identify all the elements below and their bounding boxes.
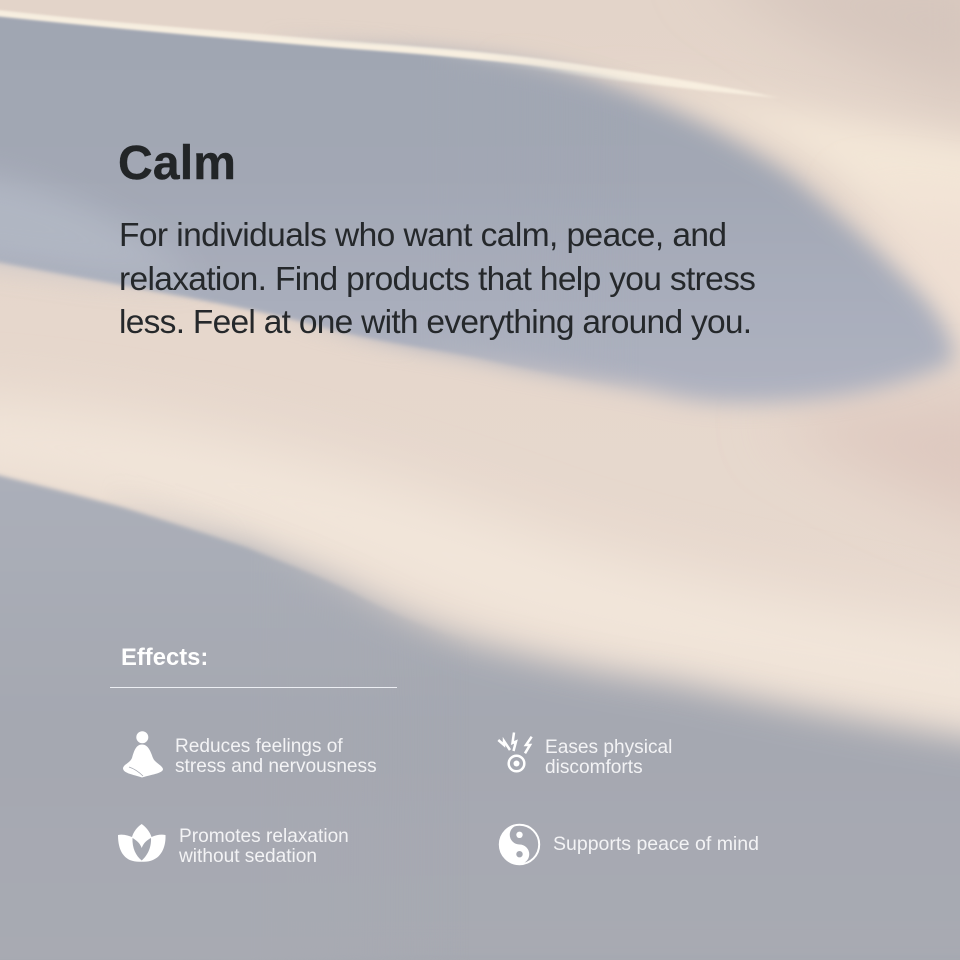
icon: lotus <box>118 824 166 862</box>
text: eases discomfort: discomforts <box>545 757 643 778</box>
top highlight strip <box>0 4 780 98</box>
top right darker tone <box>700 0 960 110</box>
icon: pain relief target <box>498 732 533 772</box>
pink shade on the right <box>770 390 960 530</box>
description: relaxation. Find products that help you stress <box>119 260 755 298</box>
text: reduces stress <box>175 736 377 777</box>
title: Calm <box>118 137 236 190</box>
lower dune shadow <box>144 510 960 790</box>
text: eases discomfort <box>545 737 672 778</box>
text: promotes relaxation: without sedation <box>179 846 317 867</box>
highlight crest over dune edge <box>0 4 780 98</box>
text: promotes relaxation: Promotes relaxation <box>179 826 349 847</box>
upper dune shadow <box>316 36 960 414</box>
description <box>119 217 755 341</box>
effects heading: Effects: <box>121 644 208 671</box>
cream band across the middle <box>0 400 960 735</box>
text: peace of mind: Supports peace of mind <box>553 833 759 855</box>
solid base of the lower dune <box>0 790 960 960</box>
text: reduces stress: Reduces feelings of <box>175 736 343 757</box>
icon: yin yang <box>498 824 540 866</box>
text: promotes relaxation <box>179 826 349 867</box>
text: reduces stress: stress and nervousness <box>175 756 377 777</box>
cream band under the crest <box>480 58 960 340</box>
pale left patch of upper dune <box>0 170 200 280</box>
description: For individuals who want calm, peace, and <box>119 217 726 254</box>
icon: meditating figure <box>123 731 163 778</box>
description: less. Feel at one with everything around you. <box>119 304 751 341</box>
text: eases discomfort: Eases physical <box>545 737 672 758</box>
